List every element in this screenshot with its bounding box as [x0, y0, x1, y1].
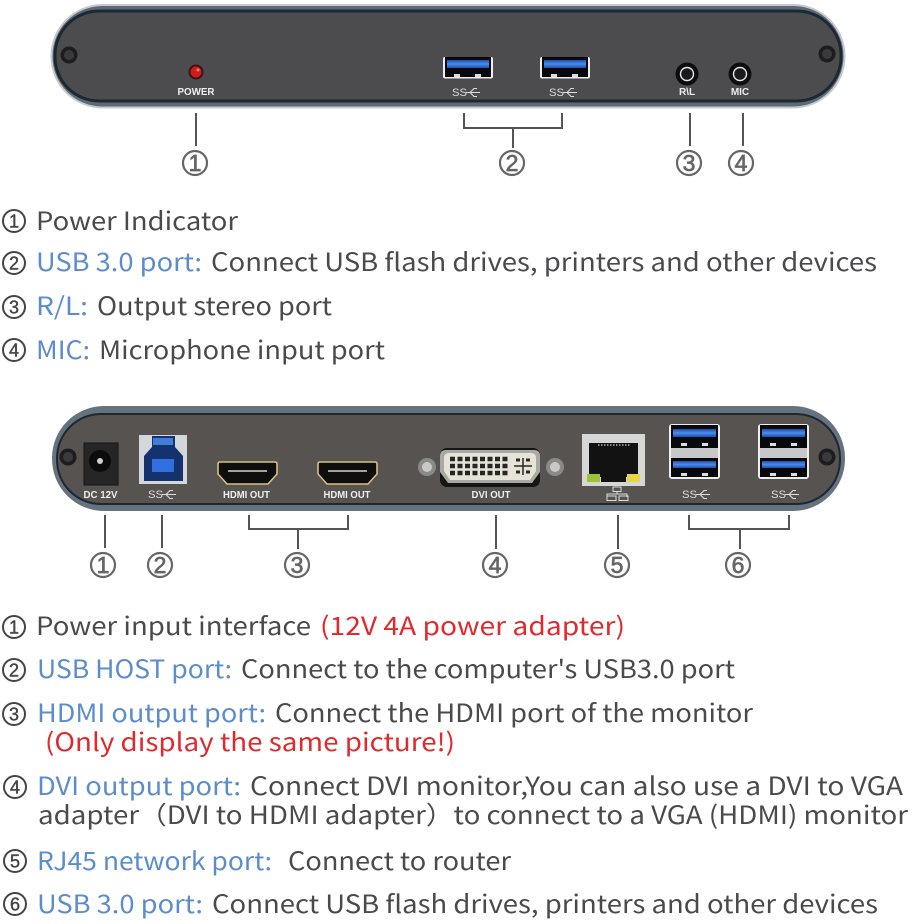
callout 4: 4	[735, 150, 748, 176]
item 3: Output stereo port	[97, 287, 333, 323]
callout 5	[605, 515, 629, 578]
icon: right screw	[818, 448, 836, 466]
stacked USB ports 2	[758, 424, 809, 479]
audio jack R/L	[676, 62, 698, 86]
item 3: (Only display the same picture!)	[45, 723, 455, 759]
icon: right screw	[818, 46, 836, 62]
SS USB logo 2	[549, 87, 577, 99]
HDMI port 2	[318, 462, 377, 484]
item 4: DVI output port:	[37, 767, 241, 803]
item 2: Connect to the computer's USB3.0 port	[241, 650, 736, 686]
SS USB logo stack 2: SS	[771, 489, 786, 501]
item 5: RJ45 network port:	[37, 842, 272, 878]
item 4: Connect DVI monitor,You can also use a DVI to VGA	[250, 767, 904, 803]
item 2: 2	[9, 254, 19, 274]
callout 2: 2	[506, 150, 518, 176]
item 5	[4, 842, 511, 878]
callout 1: 1	[97, 552, 109, 578]
callout 6: 6	[732, 552, 744, 578]
top text list	[3, 202, 877, 367]
callout 2	[464, 113, 562, 176]
SS USB logo stack 1	[682, 489, 710, 501]
callout 1	[183, 113, 207, 176]
MIC label: MIC	[731, 87, 749, 98]
item 3: 3	[9, 704, 19, 724]
callout 1	[91, 515, 115, 578]
SS USB logo host	[148, 489, 176, 501]
item 2: Connect USB flash drives, printers and other devices	[211, 243, 877, 279]
callout 6	[689, 515, 789, 578]
top device panel	[50, 4, 846, 108]
item 6	[4, 885, 878, 921]
SS USB logo stack 2	[771, 489, 799, 501]
item 6: Connect USB flash drives, printers and other devices	[212, 885, 878, 921]
USB port top 2	[540, 57, 590, 78]
item 1: Power input interface	[36, 607, 311, 643]
icon: network	[607, 487, 628, 500]
SS USB logo stack 1: SS	[682, 489, 697, 501]
item 2	[3, 243, 877, 279]
SS USB logo 1: SS	[452, 87, 467, 99]
DVI OUT label: DVI OUT	[472, 490, 510, 501]
item 6: 6	[10, 894, 20, 914]
R\L label: R\L	[679, 87, 695, 98]
item 1: Power Indicator	[36, 202, 238, 238]
callout 4	[483, 515, 507, 578]
bottom callouts	[91, 515, 789, 578]
bottom text list	[3, 607, 908, 921]
item 5: Connect to router	[288, 842, 511, 878]
icon: left screw	[60, 448, 76, 466]
SS USB logo host: SS	[148, 489, 163, 501]
icon: left screw	[60, 46, 78, 64]
item 4: adapter（DVI to HDMI adapter）to connect to a VGA (HDMI) monitor	[38, 796, 908, 832]
item 2: 2	[9, 660, 19, 680]
item 4: Microphone input port	[99, 331, 386, 367]
item 3	[3, 694, 753, 759]
item 1: (12V 4A power adapter)	[320, 607, 625, 643]
callout 3	[677, 113, 701, 176]
HDMI port 1	[218, 462, 277, 484]
callout 2	[148, 515, 172, 578]
DC power jack	[84, 443, 118, 485]
HDMI OUT label 1: HDMI OUT	[223, 490, 270, 501]
callout 3: 3	[291, 552, 303, 578]
SS USB logo 1	[452, 87, 480, 99]
HDMI OUT label 2: HDMI OUT	[324, 490, 370, 501]
item 5: 5	[10, 852, 20, 872]
item 4: 4	[9, 340, 19, 360]
item 4	[4, 767, 908, 832]
item 2: USB 3.0 port:	[36, 243, 202, 279]
bottom device panel	[52, 406, 845, 511]
microphone jack	[728, 62, 752, 86]
item 6: USB 3.0 port:	[37, 885, 203, 921]
top callouts	[183, 113, 753, 176]
POWER label: POWER	[178, 87, 215, 98]
item 3: Connect the HDMI port of the monitor	[275, 694, 753, 730]
item 3: 3	[9, 298, 19, 318]
callout 4: 4	[489, 552, 502, 578]
item 1: 1	[9, 618, 19, 638]
item 1: 1	[9, 212, 19, 232]
RJ45 port	[582, 434, 645, 486]
item 4: 4	[10, 778, 20, 798]
DVI port	[418, 448, 564, 487]
item 2	[3, 650, 736, 686]
USB B host port	[139, 435, 187, 484]
callout 1: 1	[189, 150, 201, 176]
item 3	[3, 287, 333, 323]
item 1	[3, 607, 625, 643]
SS USB logo 2: SS	[549, 87, 564, 99]
callout 3	[249, 515, 348, 578]
item 4: MIC:	[36, 331, 90, 367]
item 4	[3, 331, 386, 367]
callout 4	[729, 113, 753, 176]
stacked USB ports 1	[669, 424, 720, 479]
power LED	[188, 64, 204, 80]
callout 3: 3	[683, 150, 695, 176]
item 2: USB HOST port:	[37, 650, 232, 686]
callout 5: 5	[611, 552, 623, 578]
item 3: R/L:	[36, 287, 88, 323]
item 3: HDMI output port:	[37, 694, 266, 730]
USB port top 1	[443, 57, 493, 78]
DC 12V label: DC 12V	[84, 490, 118, 501]
callout 2: 2	[154, 552, 166, 578]
